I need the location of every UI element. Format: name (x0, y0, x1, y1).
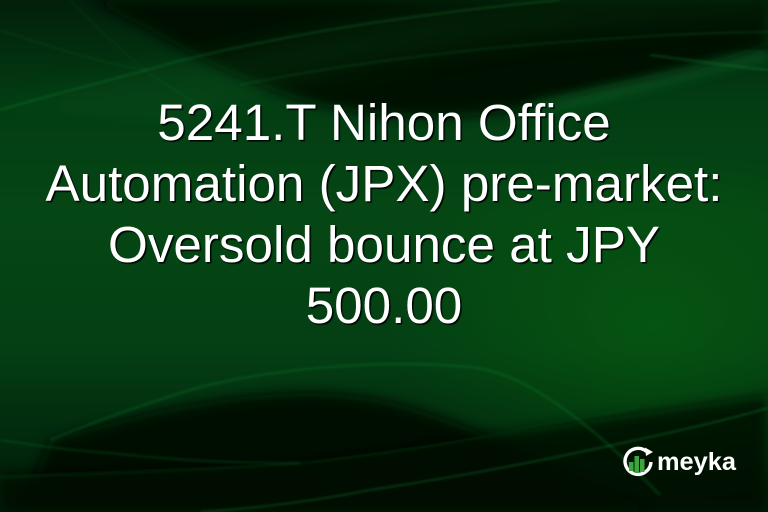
wordmark: meyka (657, 448, 737, 476)
icon: ring with bars (625, 448, 653, 474)
title: 500.00 (306, 277, 462, 334)
title: Automation (JPX) pre-market: (45, 155, 723, 212)
title: Oversold bounce at JPY (108, 216, 660, 273)
title (45, 94, 723, 334)
title: 5241.T Nihon Office (157, 94, 611, 151)
logo: meyka (623, 446, 737, 476)
